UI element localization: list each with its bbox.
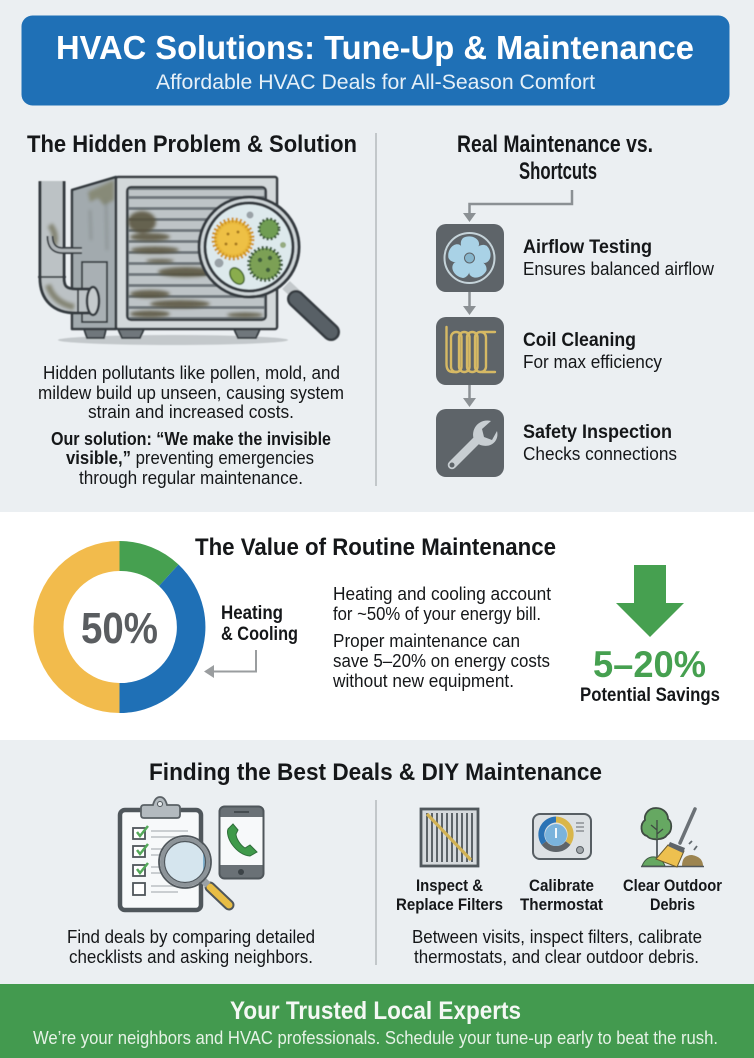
savings label: Potential Savings [580,685,720,706]
energy text: Proper maintenance can [333,631,520,651]
footer banner [0,984,754,1058]
thermostat label [520,876,603,914]
illustration: dirty AC unit with magnifier [36,177,331,345]
donut value: 50% [81,604,158,653]
energy text [332,584,551,691]
step: safety inspection: Safety Inspection [523,422,672,443]
step: safety inspection: Checks connections [523,444,677,464]
header banner [22,16,730,106]
step: coil cleaning: Coil Cleaning [523,330,636,351]
heading: value: The Value of Routine Maintenance [195,534,556,561]
panel: real maintenance vs shortcuts [436,131,715,477]
solution text: through regular maintenance. [79,468,303,488]
description text: mildew build up unseen, causing system [38,383,344,403]
step: airflow testing: Ensures balanced airflow [523,259,715,279]
debris label: Debris [650,895,695,914]
energy text: without new equipment. [332,671,514,691]
icon: savings arrow [616,565,684,637]
find deals text: checklists and asking neighbors. [69,947,313,967]
donut label [221,602,298,645]
thermostat label: Calibrate [529,876,594,895]
step: safety inspection [436,409,677,477]
debris label [623,876,722,914]
flow arrows [463,190,572,407]
solution text: Our solution: “We make the invisible [51,429,331,449]
heading: hidden problem: The Hidden Problem & Solution [27,131,357,158]
solution text [51,429,331,488]
arrow: label to donut [204,650,256,678]
thermostat label: Thermostat [520,895,603,914]
icon: thermostat [533,814,591,859]
donut chart [33,541,205,713]
step: airflow testing [436,224,715,292]
step: coil cleaning: For max efficiency [523,352,662,372]
footer text: We’re your neighbors and HVAC professionals. Schedule your tune-up early to beat the rush. [33,1028,718,1048]
description text: Hidden pollutants like pollen, mold, and [43,363,340,383]
title: HVAC Solutions: Tune-Up & Maintenance [56,29,694,66]
energy text: Heating and cooling account [333,584,551,604]
filter label: Replace Filters [396,895,503,914]
debris label: Clear Outdoor [623,876,722,895]
subtitle: Affordable HVAC Deals for All-Season Comfort [156,71,595,94]
filter label: Inspect & [416,876,483,895]
heading: deals: Finding the Best Deals & DIY Maintenance [149,759,602,786]
step: coil cleaning [436,317,662,385]
energy text: save 5–20% on energy costs [333,651,550,671]
icon: tree and broom [641,808,704,867]
heading: real maintenance [457,131,653,185]
heading: real maintenance: Shortcuts [519,158,597,185]
donut label: Heating [221,602,283,624]
DIY text: thermostats, and clear outdoor debris. [414,947,699,967]
step: airflow testing: Airflow Testing [523,237,652,258]
description text: strain and increased costs. [88,402,294,422]
energy text: for ~50% of your energy bill. [333,604,541,624]
panel: finding the best deals and DIY maintenance [67,759,722,967]
footer heading: Your Trusted Local Experts [230,997,521,1025]
solution text: visible,” preventing emergencies [66,448,314,468]
panel: the hidden problem and solution [27,131,357,488]
description text [38,363,344,422]
heading: real maintenance: Real Maintenance vs. [457,131,653,158]
find deals text [67,927,315,967]
donut label: & Cooling [221,623,298,645]
DIY text: Between visits, inspect filters, calibrate [412,927,702,947]
savings figure: 5–20% [593,644,706,685]
icon: clipboard with magnifier and phone [120,797,264,910]
DIY text [412,927,702,967]
icon: filter [421,809,478,866]
find deals text: Find deals by comparing detailed [67,927,315,947]
filter label [396,876,503,914]
panel: the value of routine maintenance [0,512,754,740]
